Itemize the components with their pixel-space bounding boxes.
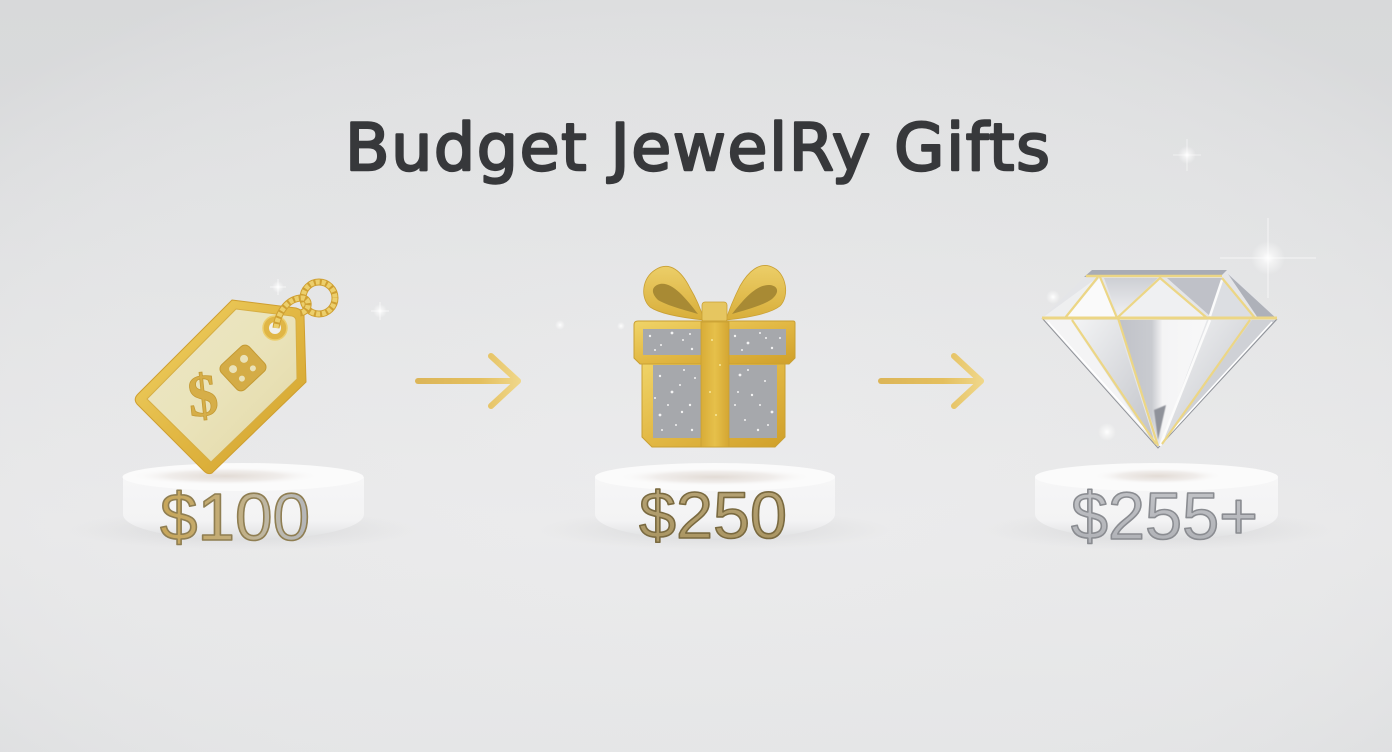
panel: $100 tier — [68, 282, 418, 555]
arrow: second — [881, 356, 981, 406]
icon: silver facet lines — [1042, 280, 1277, 448]
icon: ornate glyph on tag — [218, 343, 268, 393]
icon: rope ring — [276, 282, 335, 328]
title: Budget JewelRy Gifts — [345, 111, 1050, 186]
price: $255+: $255+ — [1071, 479, 1258, 554]
icon: vertical ribbon — [701, 322, 729, 447]
icon: ribbon bow — [644, 265, 786, 322]
sparkles — [270, 139, 1316, 441]
podium: $100 — [68, 463, 418, 550]
panel: $255+ tier — [982, 270, 1332, 554]
icon: diamond — [1042, 270, 1277, 448]
icon: gold price tag — [135, 282, 335, 474]
price: $100: $100 — [160, 480, 310, 555]
icon: glitter — [649, 332, 781, 431]
icon: box body — [642, 361, 785, 447]
icon: gift box — [634, 265, 795, 447]
icon: gold facet lines — [1042, 276, 1277, 446]
podium: $255+ — [982, 463, 1332, 550]
podium: $250 — [540, 463, 890, 550]
panel: $250 tier — [540, 265, 890, 552]
price: $250: $250 — [639, 478, 787, 552]
icon: box lid — [634, 321, 795, 364]
icon: dollar sign on tag: $ — [184, 361, 221, 430]
arrow: first — [418, 356, 518, 406]
